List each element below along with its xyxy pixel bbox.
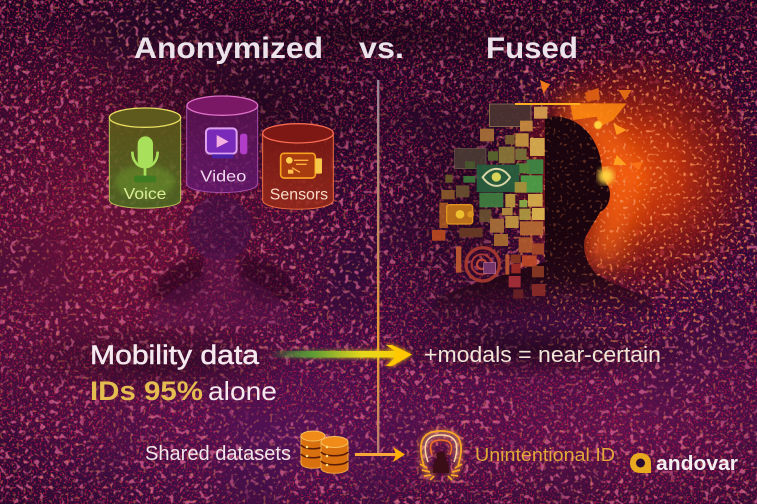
head and shoulders silhouette (420, 116, 660, 325)
fused figure: head silhouette with mosaic (420, 80, 660, 325)
arrow: mobility data to modals (270, 345, 412, 366)
label: Video: Video (200, 169, 246, 186)
icon: fingerprint person (420, 431, 462, 480)
title: vs.: vs. (359, 32, 404, 65)
text: IDs 95% alone: IDs 95% (90, 376, 203, 406)
cylinder: Video (187, 96, 258, 193)
cylinder: Sensors (263, 124, 333, 209)
text: Mobility data: Mobility data (90, 340, 259, 370)
title: Anonymized: Anonymized (134, 32, 323, 65)
text: Unintentional ID: Unintentional ID (475, 445, 615, 465)
anonymized silhouette (150, 196, 300, 326)
icon: camera lens (456, 247, 509, 281)
cylinder group: Voice, Video, Sensors (109, 96, 333, 209)
icon: database stacks (301, 431, 348, 473)
text: Shared datasets: Shared datasets (145, 443, 291, 465)
vertical divider line (377, 80, 379, 454)
icon: sensor chip (439, 203, 474, 228)
icon: eye (483, 169, 510, 186)
mosaic tiles (432, 104, 547, 299)
fire shards above head (515, 80, 643, 184)
speckles inside head (540, 110, 620, 310)
label: Sensors: Sensors (270, 186, 328, 203)
logo: andovar: andovar (656, 453, 738, 475)
label: Voice: Voice (124, 186, 166, 203)
text: +modals = near-certain: +modals = near-certain (424, 342, 661, 367)
text: IDs 95% alone (90, 376, 277, 406)
fire glow behind the fused head (476, 46, 757, 360)
arrow: shared datasets to unintentional ID (355, 447, 405, 462)
cylinder: Voice (109, 108, 181, 208)
text: IDs 95% alone: alone (208, 376, 277, 406)
title: Fused: Fused (486, 32, 578, 65)
